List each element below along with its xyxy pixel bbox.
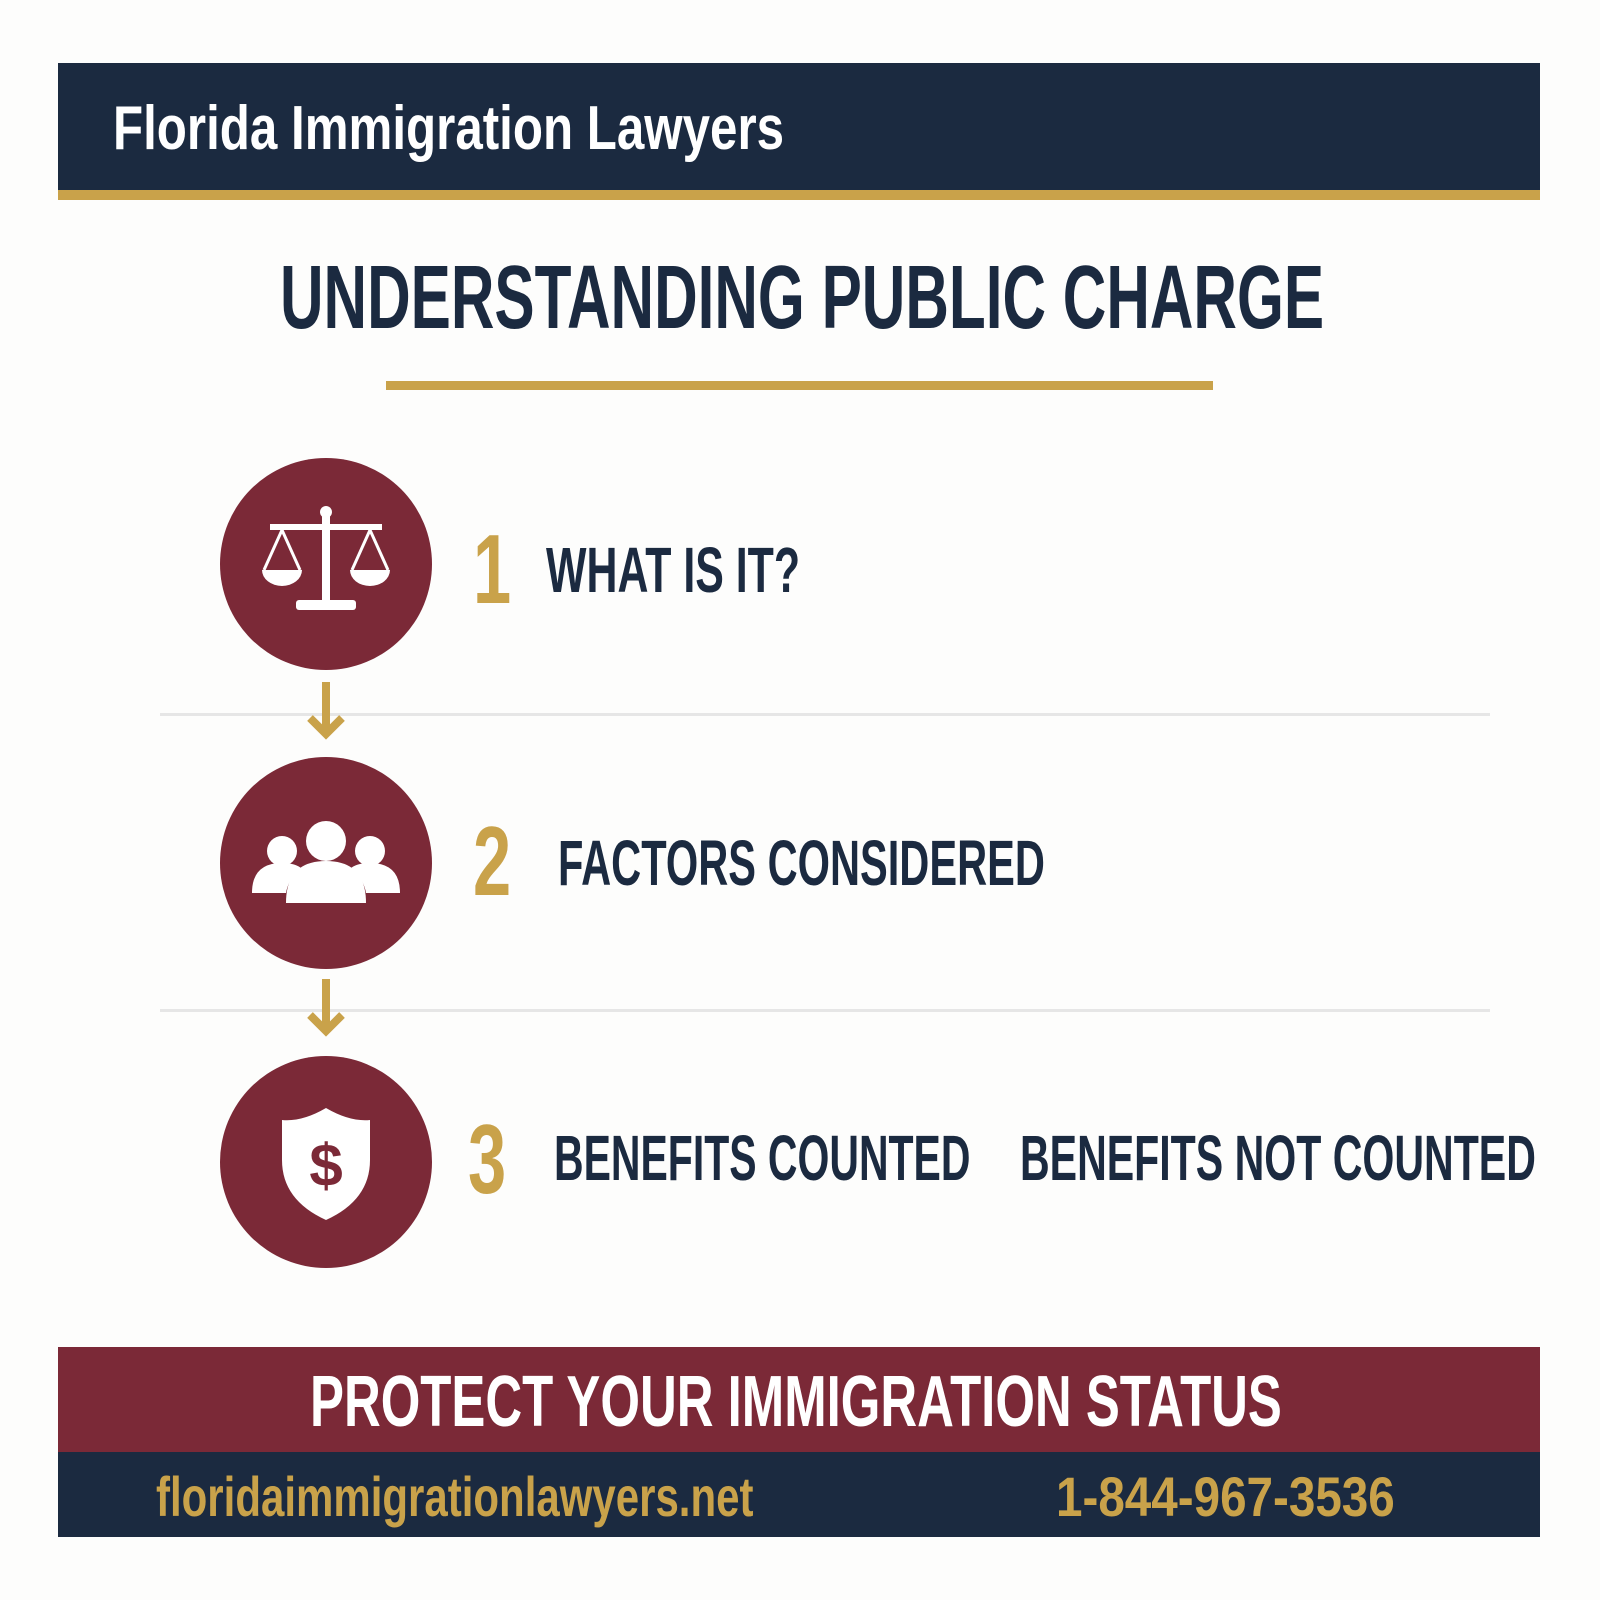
- header text: Florida Immigration Lawyers: [113, 94, 784, 163]
- icon: people: [220, 757, 432, 969]
- arrow 1: [307, 682, 345, 740]
- gold stripe: [58, 190, 1540, 200]
- website: floridaimmigrationlawyers.net: [156, 1465, 753, 1528]
- footer headline: PROTECT YOUR IMMIGRATION STATUS: [310, 1362, 1282, 1442]
- label: benefits not counted: BENEFITS NOT COUNTED: [1020, 1122, 1536, 1194]
- icon: shield dollar: $: [309, 1132, 343, 1199]
- header bar: [58, 63, 1540, 192]
- title underline: [386, 381, 1213, 390]
- arrow 2: [307, 979, 345, 1036]
- icon: scales: [220, 458, 432, 670]
- number 2: 2: [473, 806, 511, 916]
- footer red banner: [58, 1347, 1540, 1452]
- label: FACTORS CONSIDERED: [558, 827, 1045, 899]
- icon: shield dollar: [220, 1056, 432, 1268]
- phone: 1-844-967-3536: [1056, 1465, 1395, 1528]
- title: UNDERSTANDING PUBLIC CHARGE: [280, 248, 1324, 348]
- label: WHAT IS IT?: [546, 534, 800, 606]
- step 3: [220, 1056, 1536, 1268]
- footer contact bar: [58, 1452, 1540, 1537]
- step 1: [220, 458, 800, 670]
- step 2: [220, 757, 1045, 969]
- label: benefits counted: BENEFITS COUNTED: [554, 1122, 970, 1194]
- divider lines: [160, 713, 1490, 716]
- number 3: 3: [468, 1104, 506, 1214]
- number 1: 1: [473, 514, 511, 624]
